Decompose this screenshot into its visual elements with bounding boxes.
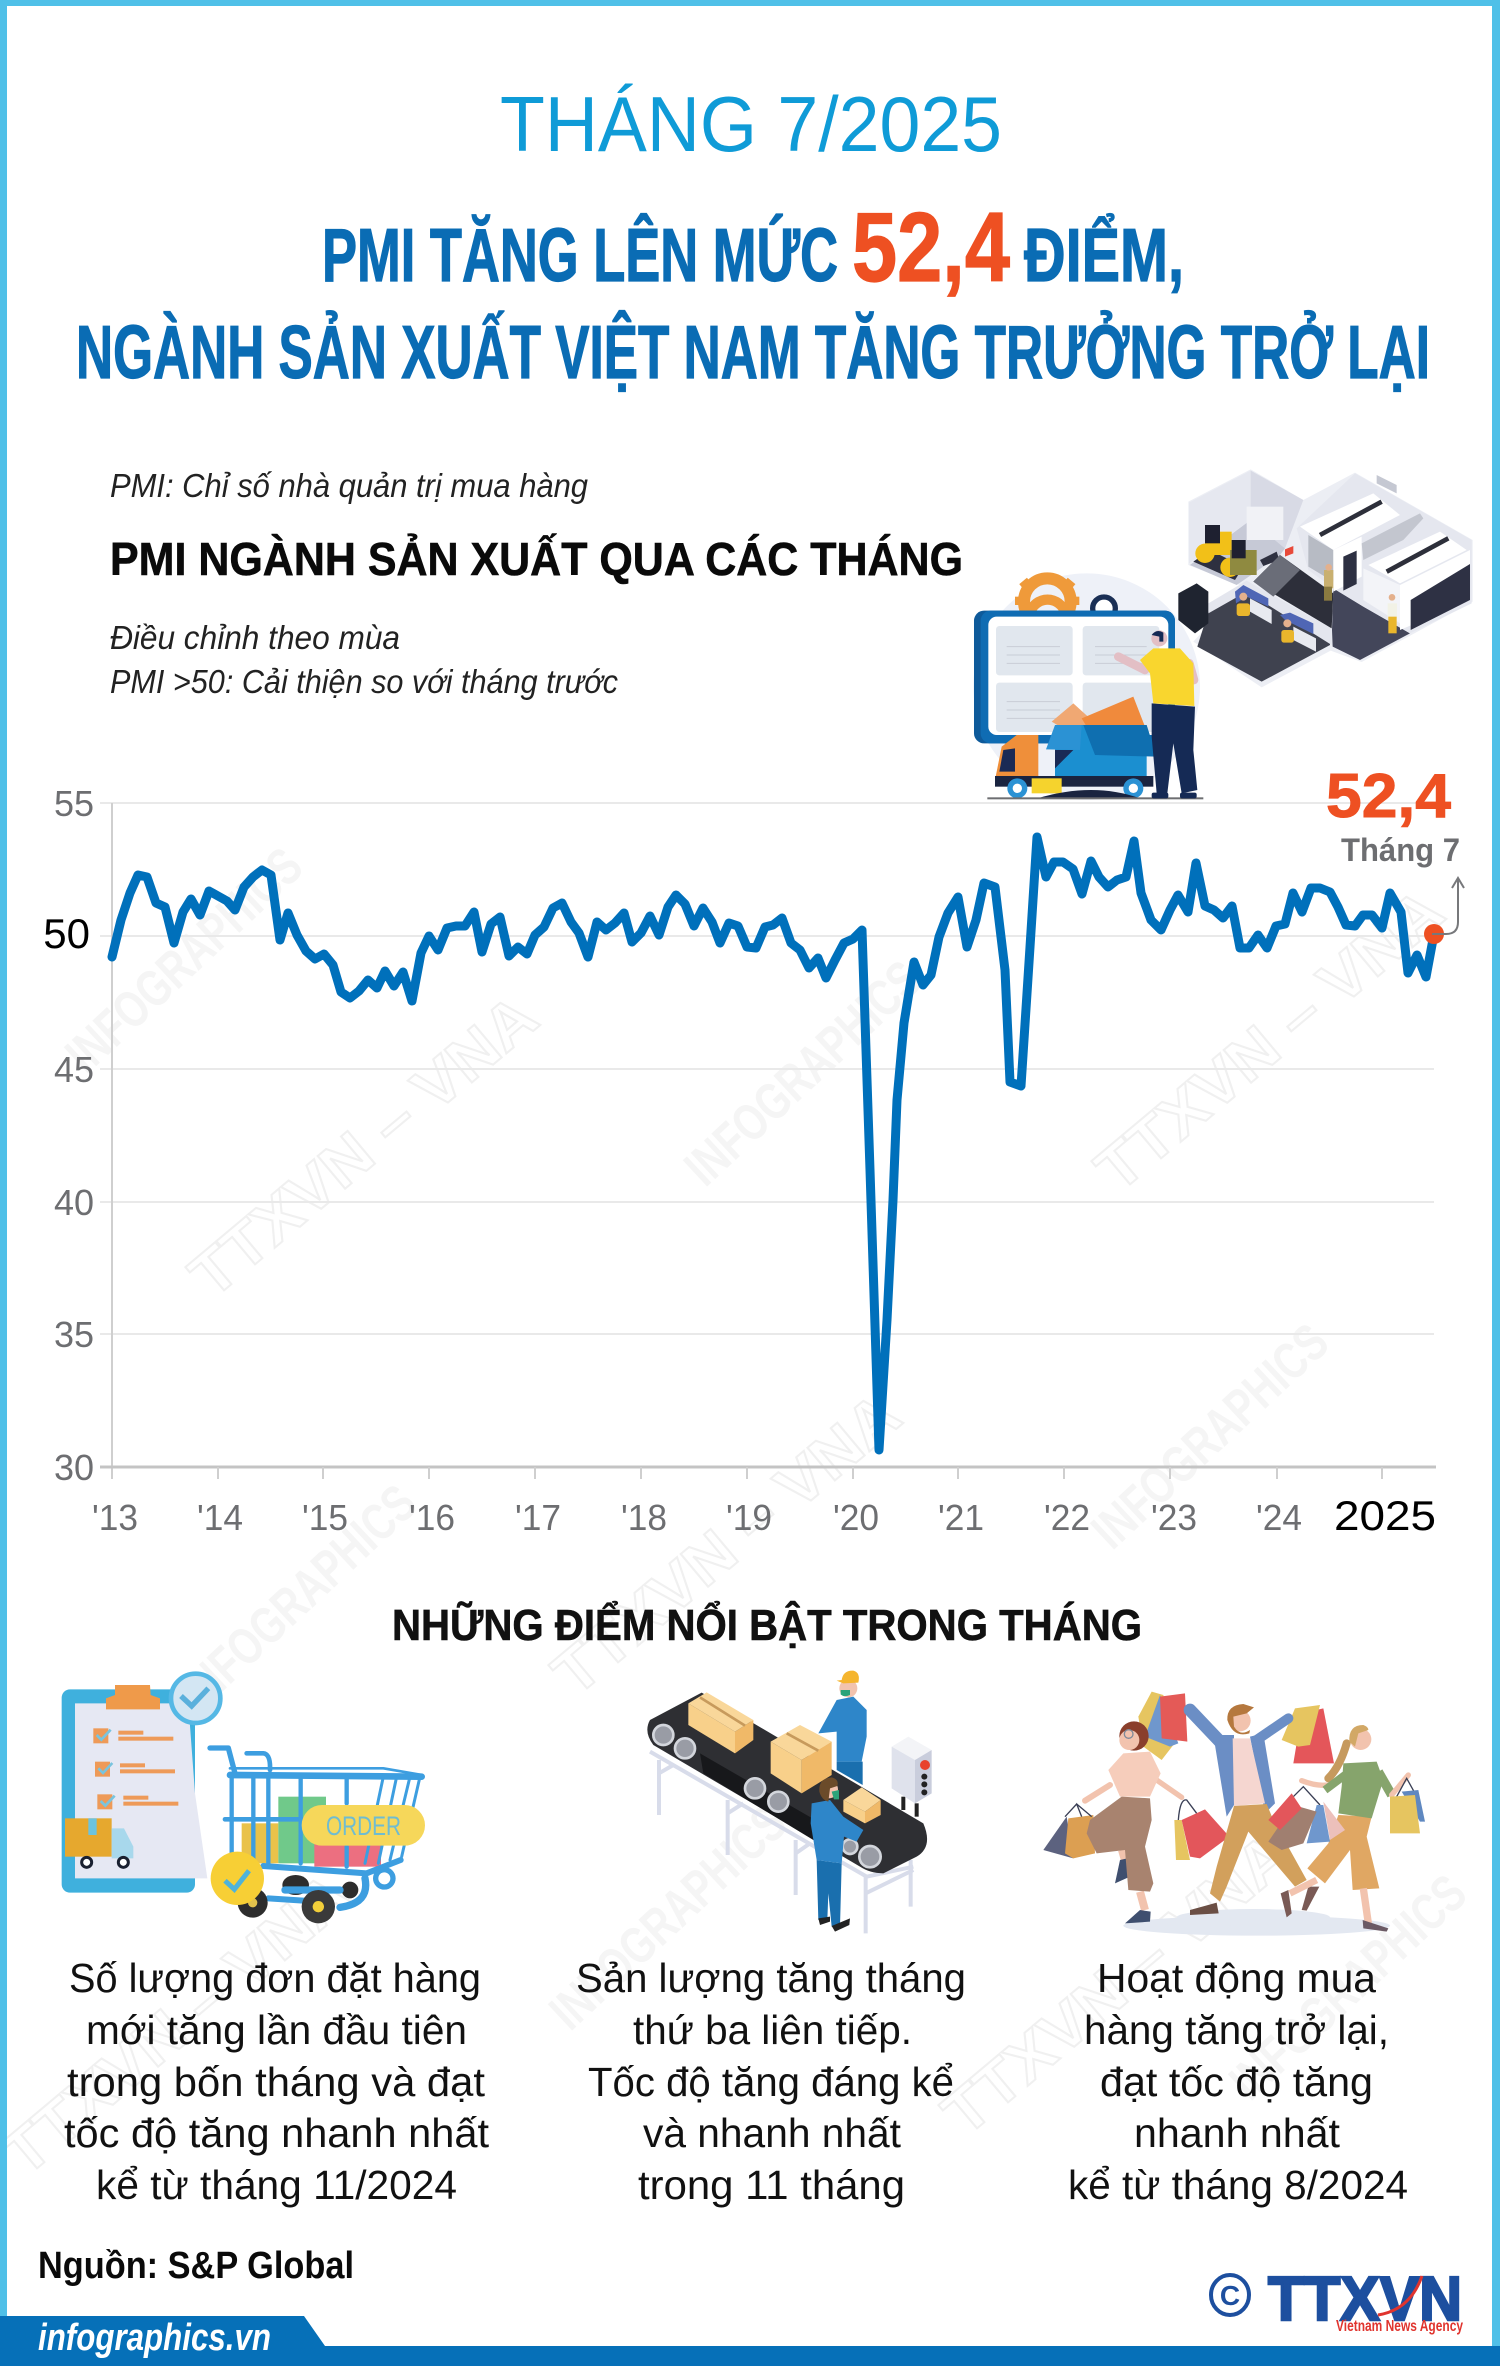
text: output — [576, 1955, 966, 2208]
text: purchasing: kể từ tháng 8/2024 — [1068, 2162, 1408, 2208]
chart grid and axes — [100, 803, 1436, 1479]
footer band: infographics.vn — [38, 2317, 271, 2359]
icon: clipboard and cart: ORDER — [326, 1811, 401, 1841]
y axis labels: 30 — [54, 1447, 94, 1488]
icon: conveyor and workers — [647, 1671, 932, 1933]
text: TTXVN – VNA — [177, 982, 551, 1311]
x axis labels: '17 — [515, 1497, 561, 1538]
latest value marker — [1424, 924, 1444, 944]
text: output: Tốc độ tăng đáng kể — [588, 2059, 954, 2105]
text: new orders: kể từ tháng 11/2024 — [96, 2162, 457, 2208]
x axis labels: '19 — [726, 1497, 772, 1538]
y axis labels: 40 — [54, 1182, 94, 1223]
y axis labels: 50 — [43, 910, 90, 957]
x axis labels: '15 — [302, 1497, 348, 1538]
x axis labels: '22 — [1044, 1497, 1090, 1538]
x axis labels: '13 — [92, 1497, 138, 1538]
source: Nguồn: S&P Global — [38, 2245, 354, 2287]
text: TTXVN – VNA — [540, 1380, 914, 1709]
title: headline: 52,4 — [852, 192, 1010, 302]
icon: isometric factory — [1178, 469, 1473, 687]
text: output: thứ ba liên tiếp. — [633, 2007, 912, 2053]
icon: dashboard, truck and worker — [973, 573, 1203, 800]
text: new orders: Số lượng đơn đặt hàng — [69, 1955, 481, 2001]
text: output: Sản lượng tăng tháng — [576, 1955, 966, 2001]
text: INFOGRAPHICS — [169, 1474, 428, 1721]
callout: latest value — [1326, 762, 1460, 868]
y axis labels: 55 — [54, 783, 94, 824]
y axis labels — [43, 783, 94, 1488]
PMI line — [112, 837, 1434, 1450]
line chart: PMI by month — [43, 762, 1464, 1539]
arrow: latest value callout — [1432, 878, 1464, 934]
text: new orders: mới tăng lần đầu tiên — [86, 2007, 467, 2053]
text: purchasing: đạt tốc độ tăng — [1100, 2059, 1373, 2105]
text: INFOGRAPHICS — [1081, 1313, 1340, 1560]
callout: latest value: Tháng 7 — [1341, 832, 1460, 868]
text: new orders: trong bốn tháng và đạt — [67, 2059, 486, 2105]
logo: TTXVN: C — [1220, 2280, 1240, 2311]
chart intro text: Điều chỉnh theo mùa — [110, 619, 400, 656]
footer band — [0, 2316, 1500, 2366]
panel: new orders — [62, 1674, 490, 2208]
text: TTXVN – VNA — [930, 1820, 1304, 2149]
x axis labels: '20 — [833, 1497, 879, 1538]
text: purchasing: nhanh nhất — [1134, 2110, 1341, 2156]
text: output: trong 11 tháng — [638, 2162, 905, 2208]
x axis labels: 2025 — [1334, 1492, 1436, 1539]
logo: TTXVN: TTXVN — [1268, 2265, 1462, 2334]
chart intro text: PMI >50: Cải thiện so với tháng trước — [110, 663, 618, 700]
icon: clipboard and cart — [62, 1674, 425, 1923]
title: headline: ĐIỂM, — [1024, 213, 1184, 297]
text: purchasing: Hoạt động mua — [1097, 1955, 1376, 2001]
chart intro text — [110, 467, 963, 700]
y axis labels: 35 — [54, 1314, 94, 1355]
callout: latest value: 52,4 — [1326, 762, 1452, 831]
text: INFOGRAPHICS — [674, 950, 933, 1197]
heading: highlights: NHỮNG ĐIỂM NỔI BẬT TRONG THÁNG — [392, 1599, 1142, 1650]
y axis labels: 45 — [54, 1049, 94, 1090]
text: TTXVN – VNA — [1083, 876, 1457, 1205]
text: INFOGRAPHICS — [539, 1794, 798, 2041]
text: INFOGRAPHICS — [55, 837, 314, 1084]
x axis labels: '18 — [621, 1497, 667, 1538]
icon: shoppers — [1043, 1692, 1425, 1936]
x axis labels: '16 — [409, 1497, 455, 1538]
panel: purchasing — [1043, 1692, 1425, 2208]
chart intro text: PMI: Chỉ số nhà quản trị mua hàng — [110, 467, 589, 504]
chart intro text: PMI NGÀNH SẢN XUẤT QUA CÁC THÁNG — [110, 533, 963, 585]
text: new orders: tốc độ tăng nhanh nhất — [64, 2110, 490, 2156]
text: TTXVN – VNA — [0, 1860, 364, 2189]
title: headline — [76, 192, 1430, 394]
text: new orders — [64, 1955, 490, 2208]
x axis labels: '14 — [197, 1497, 243, 1538]
text: purchasing: hàng tăng trở lại, — [1084, 2007, 1389, 2053]
x axis labels: '23 — [1151, 1497, 1197, 1538]
title: headline: PMI TĂNG LÊN MỨC — [322, 213, 838, 297]
x axis labels — [92, 1492, 1436, 1539]
panel: output — [576, 1671, 966, 2208]
x axis labels: '21 — [938, 1497, 984, 1538]
title: month: THÁNG 7/2025 — [500, 80, 1002, 168]
x axis labels: '24 — [1256, 1497, 1302, 1538]
text: output: và nhanh nhất — [643, 2110, 902, 2156]
text: purchasing — [1068, 1955, 1408, 2208]
